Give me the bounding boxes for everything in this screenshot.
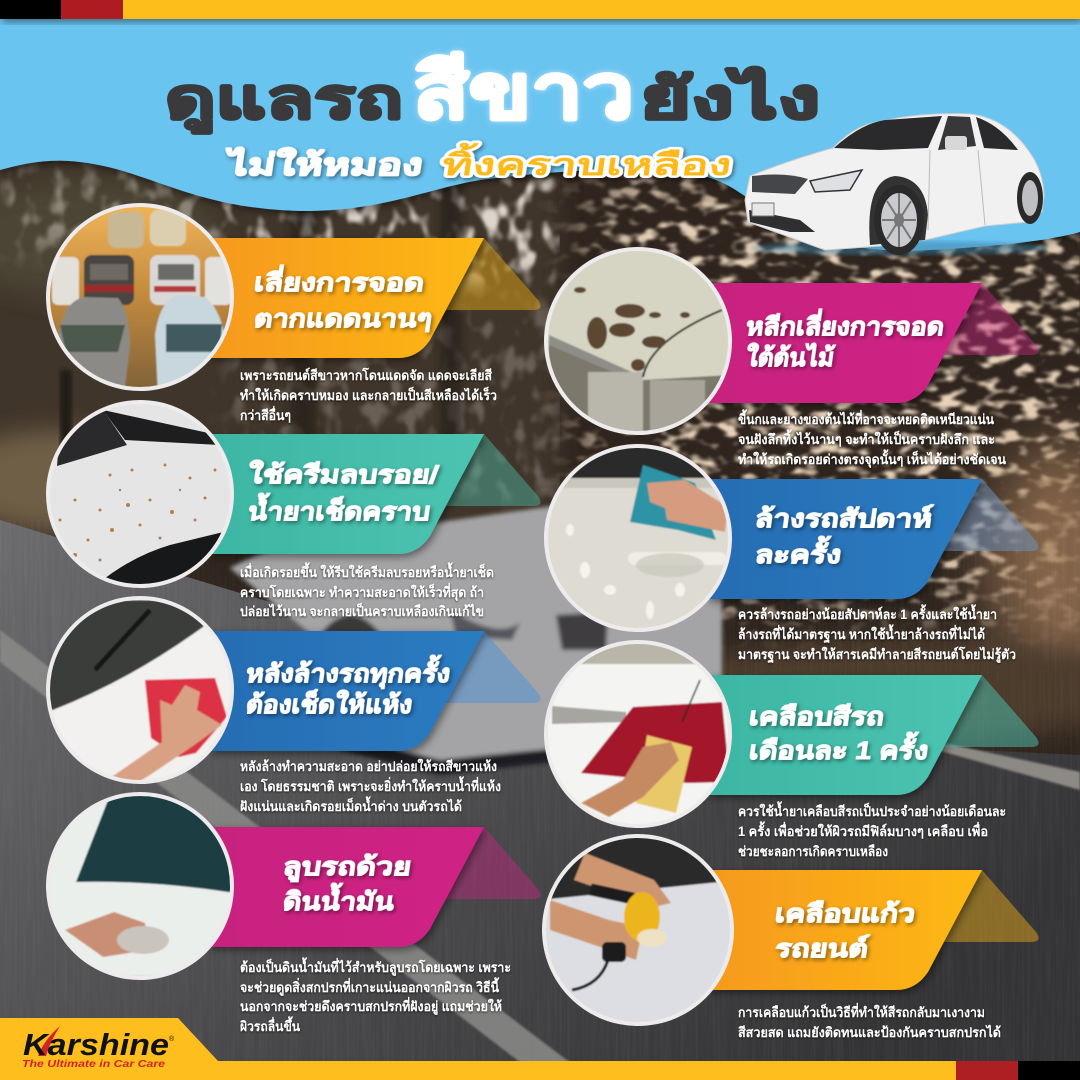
logo: Karshine: The Ultimate in Car Care xyxy=(22,1059,166,1070)
description: เมื่อเกิดรอยขึ้น ให้รีบใช้ครีมลบรอยหรือน้ำยาเช็ด xyxy=(240,562,494,580)
photo: parked cars in sunset xyxy=(46,203,234,391)
banner fold xyxy=(938,479,1039,551)
heading: ละครั้ง xyxy=(753,535,844,569)
banner xyxy=(708,870,982,990)
heading xyxy=(744,308,947,372)
heading: ล้างรถสัปดาห์ xyxy=(753,504,934,533)
banner xyxy=(708,675,982,795)
description: จนฝังลึกทิ้งไว้นานๆ จะทำให้เป็นคราบฝังลึก และ xyxy=(738,429,995,447)
photo: speckled white car xyxy=(46,400,234,588)
description: ผิวรถลื่นขึ้น xyxy=(240,1016,301,1034)
heading xyxy=(281,853,413,916)
heading: หลีกเลี่ยงการจอด xyxy=(744,308,947,341)
description: มาตรฐาน จะทำให้สารเคมีทำลายสีรถยนต์โดยไม่รู้ตัว xyxy=(738,645,1016,664)
banner fold xyxy=(938,870,1039,942)
background: central blurred white car xyxy=(230,505,722,775)
title: ทิ้งคราบเหลือง xyxy=(440,142,735,182)
banner xyxy=(210,238,484,358)
heading: หลังล้างรถทุกครั้ง xyxy=(244,654,453,690)
description: กว่าสีอื่นๆ xyxy=(240,405,291,423)
banner xyxy=(708,283,982,403)
panel: avoid parking in sun xyxy=(40,200,541,423)
description xyxy=(240,957,511,1034)
banner fold xyxy=(440,238,541,310)
heading xyxy=(753,504,934,569)
heading: ลูบรถด้วย xyxy=(281,853,413,883)
description: สีสวยสด แถมยังติดทนและป้องกันคราบสกปรกได้ xyxy=(738,1024,1001,1040)
description xyxy=(240,366,497,423)
description: คราบโดยเฉพาะ ทำความสะอาดให้เร็วที่สุด ถ้า xyxy=(240,582,484,601)
title: ดูแลรถ xyxy=(165,67,403,134)
photo: polishing tail light xyxy=(544,640,732,828)
description: นอกจากจะช่วยดึงคราบสกปรกที่ฝังอยู่ แถมช่วยให้ xyxy=(240,996,502,1015)
description: ทำให้เกิดคราบหมอง และกลายเป็นสีเหลืองได้เร็ว xyxy=(240,386,497,403)
logo: Karshine: ® xyxy=(169,1035,175,1043)
photo: sponge on door xyxy=(544,444,732,632)
description: ปล่อยไว้นาน จะกลายเป็นคราบเหลืองเกินแก้ไข xyxy=(240,602,484,619)
heading xyxy=(246,459,440,526)
heading: ต้องเช็ดให้แห้ง xyxy=(244,689,414,719)
bottom bar xyxy=(0,1061,1080,1080)
panel: wax monthly xyxy=(540,640,1039,859)
banner fold xyxy=(938,675,1039,747)
description: ล้างรถที่ได้มาตรฐาน หากใช้น้ำยาล้างรถที่ไม่ได้ xyxy=(738,624,985,644)
photo: hand with clay xyxy=(46,792,234,980)
heading: เคลือบสีรถ xyxy=(747,703,886,731)
logo: Karshine xyxy=(0,1018,218,1080)
title: สีขาว xyxy=(413,50,634,135)
panel: avoid parking under trees xyxy=(540,245,1039,468)
title: ไม่ให้หมอง xyxy=(221,147,425,182)
description xyxy=(240,562,494,619)
title xyxy=(165,50,820,182)
description xyxy=(240,758,501,814)
heading: รถยนต์ xyxy=(773,934,870,963)
description: หลังล้างทำความสะอาด อย่าปล่อยให้รถสีขาวแห้ง xyxy=(240,758,497,774)
heading: ใต้ต้นไม้ xyxy=(744,342,836,372)
heading: ใช้ครีมลบรอย/ xyxy=(246,459,440,489)
heading xyxy=(747,703,931,765)
banner xyxy=(210,434,484,554)
photo: hand with red cloth xyxy=(46,596,234,784)
description: การเคลือบแก้วเป็นวิธีที่ทำให้สีรถกลับมาเงางาม xyxy=(738,1002,985,1020)
heading: เคลือบแก้ว xyxy=(773,900,917,928)
description: ฝังแน่นและเกิดรอยเม็ดน้ำด่าง บนตัวรถได้ xyxy=(240,796,462,814)
heading xyxy=(773,900,917,963)
banner fold xyxy=(938,283,1039,355)
title: ยังไง xyxy=(640,66,820,130)
description: จะช่วยดูดสิ่งสกปรกที่เกาะแน่นออกจากผิวรถ วิธีนี้ xyxy=(240,977,500,996)
description xyxy=(738,604,1016,664)
description: ช่วยชะลอการเกิดคราบเหลือง xyxy=(738,844,888,859)
banner fold xyxy=(440,434,541,506)
banner fold xyxy=(440,631,541,703)
top bar xyxy=(0,0,1080,19)
description: ทำให้รถเกิดรอยด่างตรงจุดนั้นๆ เห็นได้อย่างชัดเจน xyxy=(738,449,1007,468)
sky-blue wave header xyxy=(0,10,1080,251)
panel: glass coating xyxy=(540,830,1039,1040)
heading: ดินน้ำมัน xyxy=(281,882,397,916)
banner fold xyxy=(440,827,541,899)
banner xyxy=(708,479,982,599)
banner xyxy=(210,827,484,947)
panel: wash weekly xyxy=(540,440,1039,664)
description: เอง โดยธรรมชาติ เพราะจะยิ่งทำให้คราบน้ำที่แห้ง xyxy=(240,776,501,794)
description: 1 ครั้ง เพื่อช่วยให้ผิวรถมีฟิล์มบางๆ เคลือบ เพื่อ xyxy=(738,821,988,839)
description: ควรล้างรถอย่างน้อยสัปดาห์ละ 1 ครั้งและใช้น้ำยา xyxy=(738,604,997,622)
description: เพราะรถยนต์สีขาวหากโดนแดดจัด แดดจะเลียสี xyxy=(240,366,493,383)
description xyxy=(738,801,1006,859)
banner xyxy=(210,631,484,751)
photo: stained headlight xyxy=(544,247,732,435)
description: ควรใช้น้ำยาเคลือบสีรถเป็นประจำอย่างน้อยเดือนละ xyxy=(738,801,1006,819)
photo: polisher on hood xyxy=(540,830,740,1030)
heading: เดือนละ 1 ครั้ง xyxy=(747,731,931,765)
description xyxy=(738,1002,1001,1040)
panel: wipe dry after washing xyxy=(40,590,541,814)
heading xyxy=(252,264,434,333)
heading: น้ำยาเช็ดคราบ xyxy=(246,492,433,526)
logo: Karshine: Karshine xyxy=(23,1027,169,1062)
heading xyxy=(244,654,453,719)
white car illustration xyxy=(745,114,1050,255)
panel: clay bar xyxy=(40,790,541,1034)
heading: ตากแดดนานๆ xyxy=(252,305,434,333)
heading: เลี่ยงการจอด xyxy=(252,264,427,297)
panel: use scratch remover xyxy=(40,400,541,619)
description xyxy=(738,409,1007,468)
description: ต้องเป็นดินน้ำมันที่ไว้สำหรับลูบรถโดยเฉพาะ เพราะ xyxy=(240,957,511,976)
description: ขี้นกและยางของต้นไม้ที่อาจจะหยดติดเหนียวแน่น xyxy=(738,409,995,427)
